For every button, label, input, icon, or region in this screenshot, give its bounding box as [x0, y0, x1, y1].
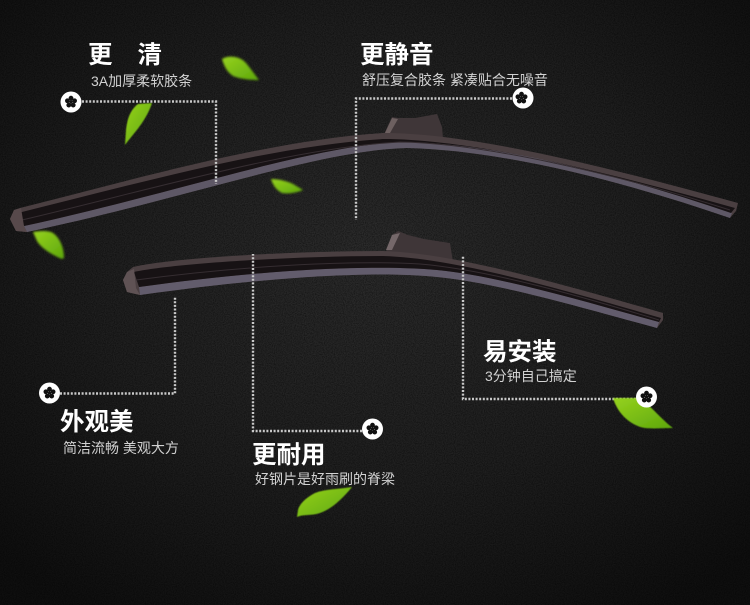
blade clip	[386, 231, 453, 262]
heading: 易安装	[483, 338, 556, 366]
blade end cap	[123, 269, 140, 295]
heading: 更 清	[88, 41, 162, 69]
subtext: 好钢片是好雨刷的脊梁	[255, 471, 395, 487]
callout: 更耐用	[252, 254, 395, 487]
blade channel highlight	[22, 142, 730, 220]
blade clip	[383, 114, 443, 138]
callout: 外观美	[39, 297, 179, 456]
blade end cap	[10, 208, 27, 232]
blade body top rim	[10, 133, 738, 232]
marker	[39, 382, 60, 404]
leaf: below long blade	[271, 179, 303, 193]
dotted leader	[60, 297, 175, 394]
marker	[60, 92, 82, 112]
subtext: 舒压复合胶条 紧凑贴合无噪音	[362, 72, 548, 88]
blade dark channel	[134, 256, 661, 322]
leaf: top centre	[222, 57, 259, 80]
leaf: under first callout line	[125, 103, 152, 145]
blade channel highlight	[136, 263, 659, 320]
marker	[362, 418, 383, 440]
heading: 外观美	[60, 408, 134, 436]
heading: 更静音	[360, 41, 434, 69]
marker	[636, 386, 657, 408]
blade underside strip	[139, 268, 659, 328]
subtext: 3分钟自己搞定	[485, 368, 577, 384]
subtext: 3A加厚柔软胶条	[91, 73, 192, 89]
dotted leader	[253, 254, 362, 431]
blade dark channel	[18, 139, 735, 226]
callout: 更清	[60, 41, 216, 184]
wiper blade: long	[10, 114, 738, 232]
callout: 更静音	[356, 41, 548, 220]
dotted leader	[356, 98, 512, 220]
blade body top rim	[123, 251, 663, 328]
subtext: 简洁流畅 美观大方	[63, 440, 179, 456]
leaf: under 更耐用	[297, 487, 352, 517]
leaf: beside marker	[613, 398, 673, 428]
dotted leader	[463, 256, 636, 399]
marker	[512, 88, 534, 108]
heading: 更耐用	[252, 441, 326, 469]
blade underside strip	[24, 142, 732, 232]
dotted leader	[82, 102, 216, 184]
leaf: below blade tip	[33, 231, 64, 259]
callout: 易安装	[463, 256, 673, 428]
wiper blade: short	[123, 231, 663, 328]
